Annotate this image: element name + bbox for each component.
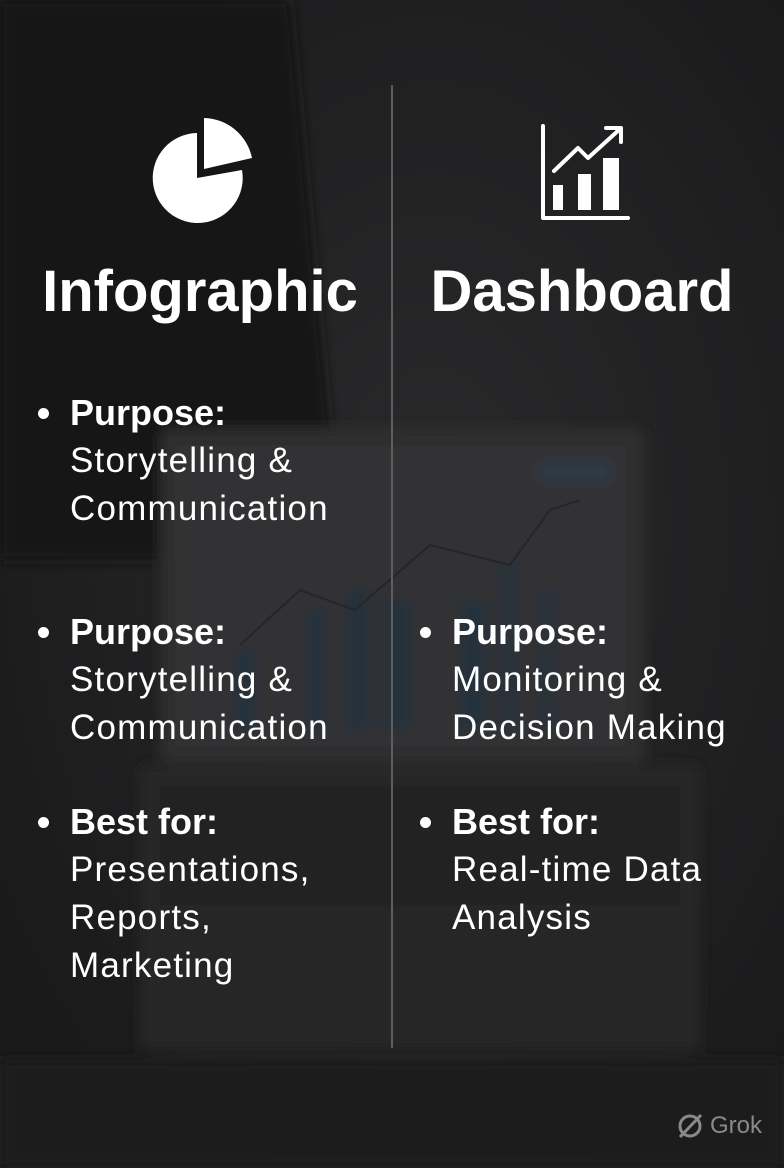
right bullet: purpose: Monitoring & <box>452 660 663 699</box>
left bullet: purpose 1: Storytelling & <box>70 441 293 480</box>
left bullet: purpose 1: Purpose: <box>70 392 226 433</box>
left bullet: purpose 2 <box>38 611 329 747</box>
right bullet: best for: Analysis <box>452 898 592 937</box>
divider <box>391 85 393 1048</box>
left bullet: purpose 2: Purpose: <box>70 611 226 652</box>
left bullet: best for: Marketing <box>70 946 234 985</box>
heading: Dashboard: Dashboard <box>431 259 733 324</box>
right bullet: best for <box>420 801 702 937</box>
left bullet: purpose 2: Storytelling & <box>70 660 293 699</box>
left bullet: best for: Best for: <box>70 801 218 842</box>
right bullet: best for: Real-time Data <box>452 850 702 889</box>
right bullet: purpose <box>420 611 727 747</box>
right bullet: purpose: Decision Making <box>452 708 727 747</box>
watermark: Grok <box>678 1112 762 1139</box>
icon: bar chart with trend arrow <box>541 124 630 220</box>
right bullet: purpose: Purpose: <box>452 611 608 652</box>
left bullet: purpose 2: Communication <box>70 708 329 747</box>
heading: Infographic: Infographic <box>42 259 358 324</box>
left bullet: best for: Presentations, <box>70 850 311 889</box>
watermark: Grok: Grok <box>710 1112 762 1139</box>
left bullet: best for: Reports, <box>70 898 212 937</box>
right bullet: best for: Best for: <box>452 801 600 842</box>
left bullet: best for <box>38 801 311 985</box>
left bullet: purpose 1: Communication <box>70 489 329 528</box>
icon: pie chart <box>152 118 252 223</box>
left bullet: purpose 1 <box>38 392 329 528</box>
